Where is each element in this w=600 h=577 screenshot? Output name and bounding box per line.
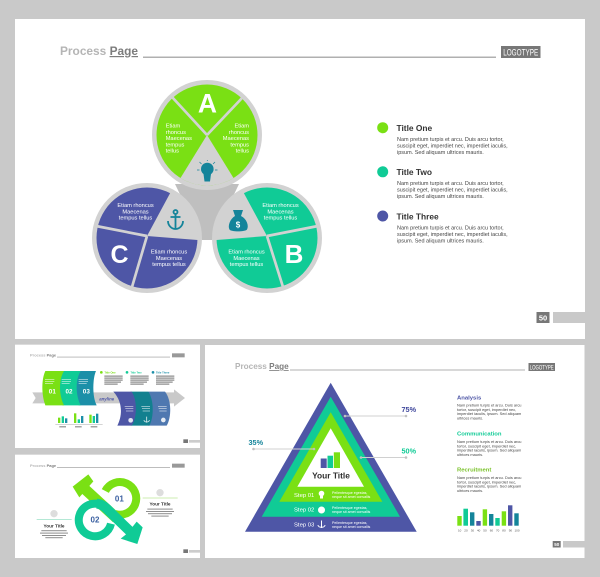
logo label: anyline bbox=[99, 396, 115, 401]
step 01: Pellentesque egestas, bbox=[332, 491, 367, 495]
step 01 bbox=[294, 491, 371, 499]
circle B: tempus tellus bbox=[230, 262, 263, 268]
step 01: Step 01 bbox=[294, 493, 314, 499]
circle C bbox=[92, 183, 202, 293]
bar chart bbox=[55, 413, 103, 427]
pyramid title: Your Title bbox=[312, 470, 350, 480]
legend titles: Title Two bbox=[130, 370, 142, 374]
circle C: C bbox=[110, 241, 129, 269]
text: communication: Nam pretium turpis et arcu. Duis arcu bbox=[457, 439, 521, 444]
circle A bbox=[152, 80, 262, 190]
text: analysis bbox=[457, 395, 521, 420]
text: recruitment bbox=[457, 468, 521, 493]
step 03 bbox=[75, 371, 97, 405]
circle C: tempus tellus bbox=[119, 216, 152, 222]
page number badge bbox=[536, 312, 585, 323]
lower step: indigo bbox=[113, 392, 136, 426]
circle A: Maecenas bbox=[223, 136, 249, 142]
bar chart: 50 bbox=[483, 528, 487, 532]
callout 50%: 50% bbox=[402, 446, 417, 456]
legend: title three: suscipit eget, imperdiet nec, imperdiet iaculis, bbox=[397, 232, 508, 238]
step 01 bbox=[42, 371, 64, 405]
bar chart: 30 bbox=[471, 528, 474, 532]
bar chart: 20 bbox=[464, 528, 468, 532]
text: communication: Communication bbox=[457, 432, 502, 438]
legend: title two: Title Two bbox=[396, 167, 432, 177]
circle B: tempus tellus bbox=[264, 216, 297, 222]
circle A: Etiam bbox=[234, 124, 249, 130]
heading: Process Page bbox=[30, 353, 57, 358]
logotype badge bbox=[172, 464, 185, 468]
bar chart: 10 bbox=[458, 528, 462, 532]
circle A: rhoncus bbox=[166, 130, 186, 136]
venn diagram bbox=[92, 80, 322, 293]
step 03: 03 bbox=[83, 388, 90, 395]
step 02 bbox=[59, 371, 81, 405]
arrow band bbox=[32, 389, 185, 407]
page number badge: 50 bbox=[539, 314, 547, 322]
circle A: rhoncus bbox=[229, 130, 249, 136]
circle B: B bbox=[285, 239, 303, 269]
legend: title two: suscipit eget, imperdiet nec, imperdiet iaculis, bbox=[397, 187, 508, 193]
legend: title two: ipsum. Sed aliquam ultrices mauris. bbox=[397, 194, 484, 200]
lower step: blue bbox=[148, 392, 170, 426]
pyramid mini bars bbox=[321, 452, 340, 468]
step 03: Pellentesque egestas, bbox=[332, 521, 367, 525]
callout right: Your Title bbox=[149, 502, 171, 507]
bar chart: 100 bbox=[514, 528, 520, 532]
callout left bbox=[37, 510, 72, 538]
callout left: Your Title bbox=[43, 523, 65, 528]
text: recruitment: ultrices mauris. bbox=[457, 488, 483, 493]
step 03 bbox=[294, 520, 371, 529]
text: recruitment: Nam pretium turpis et arcu. Duis arcu bbox=[457, 475, 521, 480]
callout 75% bbox=[344, 405, 417, 417]
legend: title two bbox=[377, 166, 508, 200]
circle C: Maecenas bbox=[122, 209, 149, 215]
pyramid bbox=[245, 383, 417, 532]
text: analysis: imperdiet iaculis, ipsum. Sed aliquam bbox=[457, 411, 521, 416]
step 03: Step 03 bbox=[294, 522, 315, 528]
bar chart: 60 bbox=[490, 528, 493, 532]
circle A: Maecenas bbox=[166, 136, 192, 142]
logotype badge: LOGOTYPE bbox=[503, 48, 538, 58]
logotype badge bbox=[172, 353, 185, 357]
callout 50% bbox=[360, 446, 417, 459]
page number badge: 50 bbox=[554, 542, 560, 547]
legend: title one: Nam pretium turpis et arcu. Duis arcu tortor, bbox=[397, 137, 504, 143]
heading: process page: Process Page bbox=[60, 44, 138, 58]
circle B: Maecenas bbox=[267, 209, 294, 215]
bar chart: 80 bbox=[502, 528, 506, 532]
circle A: Etiam bbox=[166, 124, 181, 130]
text: analysis: Nam pretium turpis et arcu. Duis arcu bbox=[457, 402, 521, 408]
circle A: tellus bbox=[166, 148, 179, 154]
legend titles bbox=[100, 370, 174, 384]
logotype badge bbox=[528, 363, 555, 372]
step 02: Step 02 bbox=[294, 508, 314, 514]
callout 35%: 35% bbox=[248, 438, 264, 447]
panel: pyramid slide bbox=[205, 345, 584, 558]
legend: title one: suscipit eget, imperdiet nec, imperdiet iaculis, bbox=[397, 143, 508, 149]
circle C: tempus tellus bbox=[152, 262, 186, 268]
text: analysis: Analysis bbox=[457, 395, 482, 401]
legend: title two: Nam pretium turpis et arcu. Duis arcu tortor, bbox=[397, 181, 504, 187]
heading: Process Page bbox=[30, 463, 57, 468]
circle A: A bbox=[198, 88, 217, 118]
loop 01 green bbox=[73, 474, 136, 518]
step 03: neque sit amet convallis bbox=[332, 525, 371, 529]
legend: title three: ipsum. Sed aliquam ultrices mauris. bbox=[397, 238, 484, 244]
footer bbox=[183, 439, 188, 443]
circle A: tempus bbox=[230, 142, 249, 148]
panel: main venn slide bbox=[15, 19, 585, 339]
circle C: Etiam rhoncus bbox=[117, 203, 154, 209]
legend: title three: Title Three bbox=[396, 212, 439, 222]
number 01: 01 bbox=[115, 494, 124, 503]
page number badge bbox=[553, 541, 584, 548]
step text blocks bbox=[45, 379, 167, 411]
legend: title one: ipsum. Sed aliquam ultrices mauris. bbox=[397, 150, 484, 156]
callout 35% bbox=[248, 438, 315, 450]
step 01: neque sit amet convallis bbox=[332, 495, 371, 499]
text: analysis: tortor, suscipit eget, imperdiet nec, bbox=[457, 407, 516, 412]
loop 02 teal bbox=[79, 504, 143, 544]
circle A: tellus bbox=[236, 148, 249, 154]
text: communication: tortor, suscipit eget, imperdiet nec, bbox=[457, 443, 516, 448]
circle A: tempus bbox=[166, 142, 185, 148]
callout right bbox=[143, 489, 178, 516]
step 01: 01 bbox=[49, 388, 56, 395]
text: recruitment: tortor, suscipit eget, imperdiet nec, bbox=[457, 479, 516, 484]
text: communication: imperdiet iaculis, ipsum. Sed aliquam bbox=[457, 448, 521, 452]
bar chart: 90 bbox=[509, 528, 512, 532]
footer bbox=[183, 549, 188, 553]
logotype badge bbox=[501, 46, 540, 58]
legend: title one: Title One bbox=[396, 123, 433, 133]
step 02: 02 bbox=[65, 388, 73, 395]
circle B: Maecenas bbox=[233, 256, 260, 262]
legend: title three bbox=[377, 210, 508, 244]
circle C: Etiam rhoncus bbox=[151, 250, 187, 256]
legend: title three: Nam pretium turpis et arcu. Duis arcu tortor, bbox=[397, 226, 504, 232]
text: communication bbox=[457, 432, 521, 457]
text: recruitment: Recruitment bbox=[457, 468, 491, 474]
number 02: 02 bbox=[91, 516, 100, 525]
icon: money bag: $ bbox=[236, 220, 241, 230]
step 02: Pellentesque egestas, bbox=[332, 506, 367, 510]
legend: title one bbox=[377, 122, 508, 156]
circle B: Etiam rhoncus bbox=[262, 203, 299, 209]
heading: Process Page bbox=[235, 362, 289, 371]
icon: anchor bbox=[168, 210, 183, 229]
text: analysis: ultrices mauris. bbox=[457, 415, 483, 420]
step 02: neque sit amet convallis bbox=[332, 510, 371, 514]
panel: infinity arrows slide bbox=[15, 455, 200, 558]
legend titles: Title One bbox=[104, 370, 116, 374]
bar chart: 40 bbox=[477, 528, 481, 532]
logotype badge: LOGOTYPE bbox=[530, 365, 554, 372]
circle B bbox=[212, 183, 322, 293]
panel: arrow process slide bbox=[15, 345, 200, 448]
legend titles: Title Three bbox=[156, 370, 170, 374]
text: communication: ultrices mauris. bbox=[457, 452, 483, 457]
bar chart bbox=[457, 505, 520, 532]
bar chart: 70 bbox=[496, 528, 500, 532]
callout 75%: 75% bbox=[402, 405, 417, 414]
lower step: teal bbox=[131, 392, 153, 426]
text: recruitment: imperdiet iaculis, ipsum. Sed aliquam bbox=[457, 484, 521, 488]
icon: light bulb bbox=[197, 160, 218, 182]
circle C: Maecenas bbox=[156, 256, 182, 262]
circle B: Etiam rhoncus bbox=[228, 250, 265, 256]
step 02 bbox=[294, 506, 371, 514]
